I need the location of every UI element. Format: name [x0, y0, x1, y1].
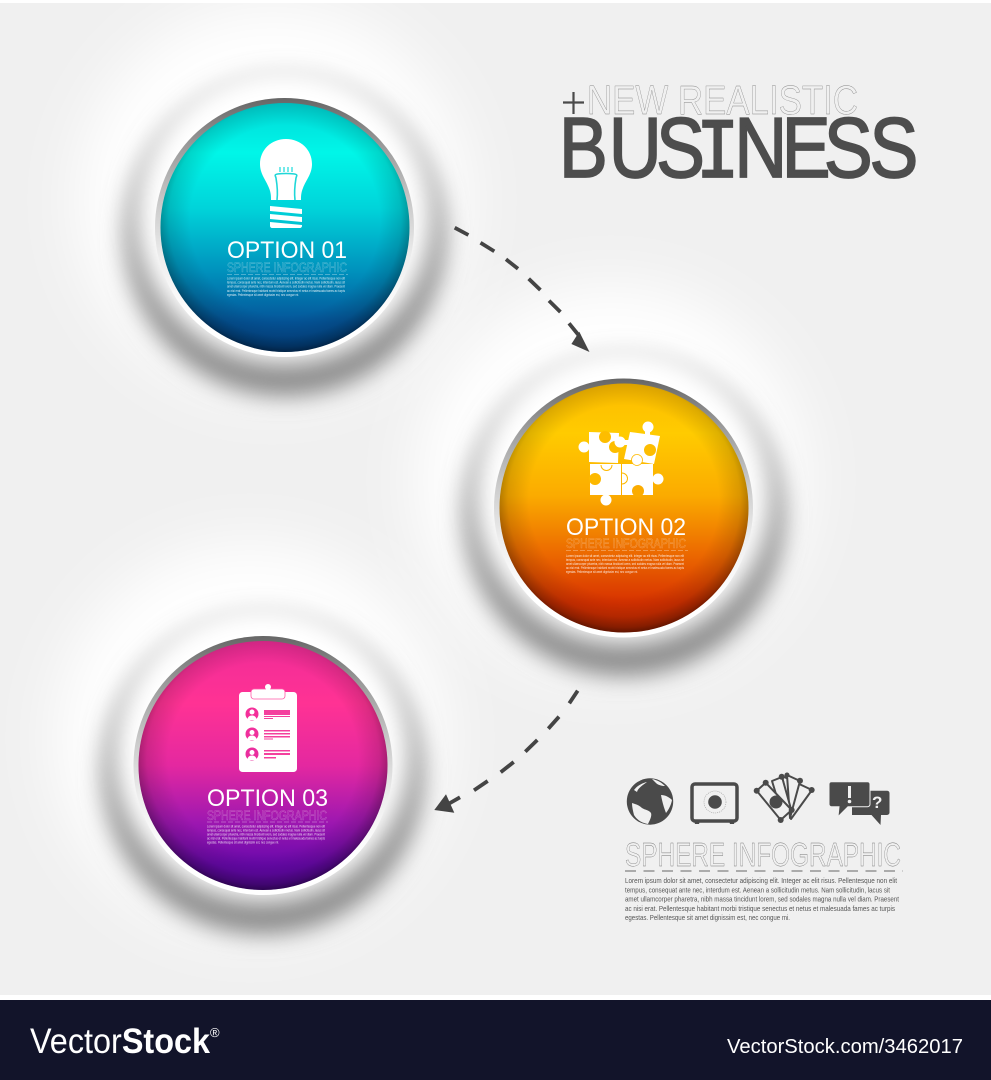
option 01 body text: tempus, consequat ante nec, interdum est. Aenean a sollicitudin metus. Nam sollicitudin, lacus sit	[227, 280, 346, 285]
option 01 body text: amet ullamcorper pharetra, nibh massa tincidunt lorem, sed sodales magna nulla vel diam. Praesent	[227, 284, 346, 289]
soft white halo 1	[77, 5, 467, 395]
description text: amet ullamcorper pharetra, nibh massa tincidunt lorem, sed sodales magna nulla vel diam. Praesent	[625, 895, 899, 904]
option 03 body text: Lorem ipsum dolor sit amet, consectetur adipiscing elit. Integer ac elit risus. Pellentesque non elit	[207, 824, 326, 828]
option 01 body text: Lorem ipsum dolor sit amet, consectetur adipiscing elit. Integer ac elit risus. Pellentesque non elit	[227, 276, 346, 280]
icon: money fan	[754, 772, 815, 823]
icon: chat bubbles: ?	[872, 793, 882, 812]
icon: puzzle pieces	[578, 422, 664, 506]
coloured face 2	[500, 384, 748, 632]
soft white halo 3	[55, 543, 445, 933]
option 03 subheading: SPHERE INFOGRAPHIC	[207, 808, 327, 823]
option 03 heading: OPTION 03	[207, 785, 328, 812]
option 01 heading: OPTION 01	[227, 237, 347, 264]
description text: tempus, consequat ante nec, interdum est. Aenean a sollicitudin metus. Nam sollicitudin, lacus sit	[625, 885, 890, 894]
coloured face 1	[160, 103, 410, 352]
option 03 body text: egestas. Pellentesque sit amet dignissim est, nec congue mi.	[207, 840, 279, 844]
title line two: S	[869, 100, 918, 195]
raised disc 1	[134, 64, 434, 364]
option 02 body text: Lorem ipsum dolor sit amet, consectetur adipiscing elit. Integer ac elit risus. Pellentesque non elit	[566, 553, 685, 558]
icon: light bulb	[260, 139, 312, 228]
drop shadow 2	[464, 356, 784, 676]
option 02 body text: ac nisi erat. Pellentesque habitant morbi tristique senectus et netus et malesuada fames ac turpis	[566, 565, 684, 570]
soft white halo 2	[416, 285, 806, 675]
rim 1	[155, 98, 414, 357]
rim 3	[134, 636, 392, 895]
face vignette 3	[138, 641, 388, 890]
panel: sphere option 01	[77, 5, 467, 396]
arrow: option 01 to option 02	[455, 228, 590, 352]
drop shadow 3	[103, 614, 423, 934]
icon: chat bubbles	[829, 782, 890, 825]
rim 2	[494, 378, 753, 638]
footer bar	[0, 1000, 991, 1080]
title line one: NEW REALISTIC	[587, 77, 858, 123]
drop shadow 1	[125, 76, 445, 396]
description heading: SPHERE INFOGRAPHIC	[625, 836, 901, 873]
option 02 heading: OPTION 02	[566, 514, 686, 541]
title line two: E	[782, 100, 830, 195]
description text: Lorem ipsum dolor sit amet, consectetur adipiscing elit. Integer ac elit risus. Pellentesque non elit	[625, 876, 897, 885]
arrow: option 02 to option 03	[434, 691, 578, 813]
description text: egestas. Pellentesque sit amet dignissim est, nec congue mi.	[625, 913, 790, 922]
title line two: S	[824, 100, 873, 195]
face vignette 2	[500, 384, 748, 632]
face vignette 1	[160, 103, 410, 352]
raised disc 3	[112, 602, 412, 902]
option 01 subheading: SPHERE INFOGRAPHIC	[227, 260, 347, 275]
option 03 body text: ac nisi erat. Pellentesque habitant morbi tristique senectus et netus et malesuada fames ac turpis	[207, 836, 325, 840]
footer image id: VectorStock.com/3462017	[727, 1036, 963, 1058]
option 03 body text: amet ullamcorper pharetra, nibh massa tincidunt lorem, sed sodales magna nulla vel diam. Praesent	[207, 832, 326, 836]
title	[559, 77, 918, 203]
description text: ac nisi erat. Pellentesque habitant morbi tristique senectus et netus et malesuada fames ac turpis	[625, 904, 895, 913]
panel: sphere option 02	[416, 285, 806, 676]
coloured face 3	[138, 641, 388, 890]
icon: clipboard	[239, 684, 297, 772]
registered mark: ®	[210, 1025, 220, 1040]
option 03 body text	[207, 824, 326, 844]
footer logo: VectorStock	[30, 1022, 210, 1061]
raised disc 2	[473, 344, 773, 644]
option 02 body text	[566, 553, 685, 574]
description text	[625, 876, 899, 922]
option 02 body text: tempus, consequat ante nec, interdum est. Aenean a sollicitudin metus. Nam sollicitudin, lacus sit	[566, 557, 685, 562]
plus sign	[563, 92, 584, 114]
title line two: N	[734, 100, 787, 195]
option 03 body text: tempus, consequat ante nec, interdum est. Aenean a sollicitudin metus. Nam sollicitudin, lacus sit	[207, 828, 326, 832]
option 02 subheading: SPHERE INFOGRAPHIC	[566, 536, 686, 551]
option 01 body text	[227, 276, 346, 297]
option 01 body text: ac nisi erat. Pellentesque habitant morbi tristique senectus et netus et malesuada fames ac turpis	[227, 288, 345, 293]
option 02 body text: amet ullamcorper pharetra, nibh massa tincidunt lorem, sed sodales magna nulla vel diam. Praesent	[566, 561, 685, 566]
panel: icons and description	[625, 772, 903, 922]
option 01 body text: egestas. Pellentesque sit amet dignissim est, nec congue mi.	[227, 292, 299, 297]
title line two: I	[696, 106, 740, 203]
icon: safe	[692, 784, 737, 824]
panel: sphere option 03	[55, 543, 445, 934]
icon: globe	[627, 778, 673, 825]
title line two: BUS	[559, 100, 705, 195]
option 02 body text: egestas. Pellentesque sit amet dignissim est, nec congue mi.	[566, 569, 638, 574]
